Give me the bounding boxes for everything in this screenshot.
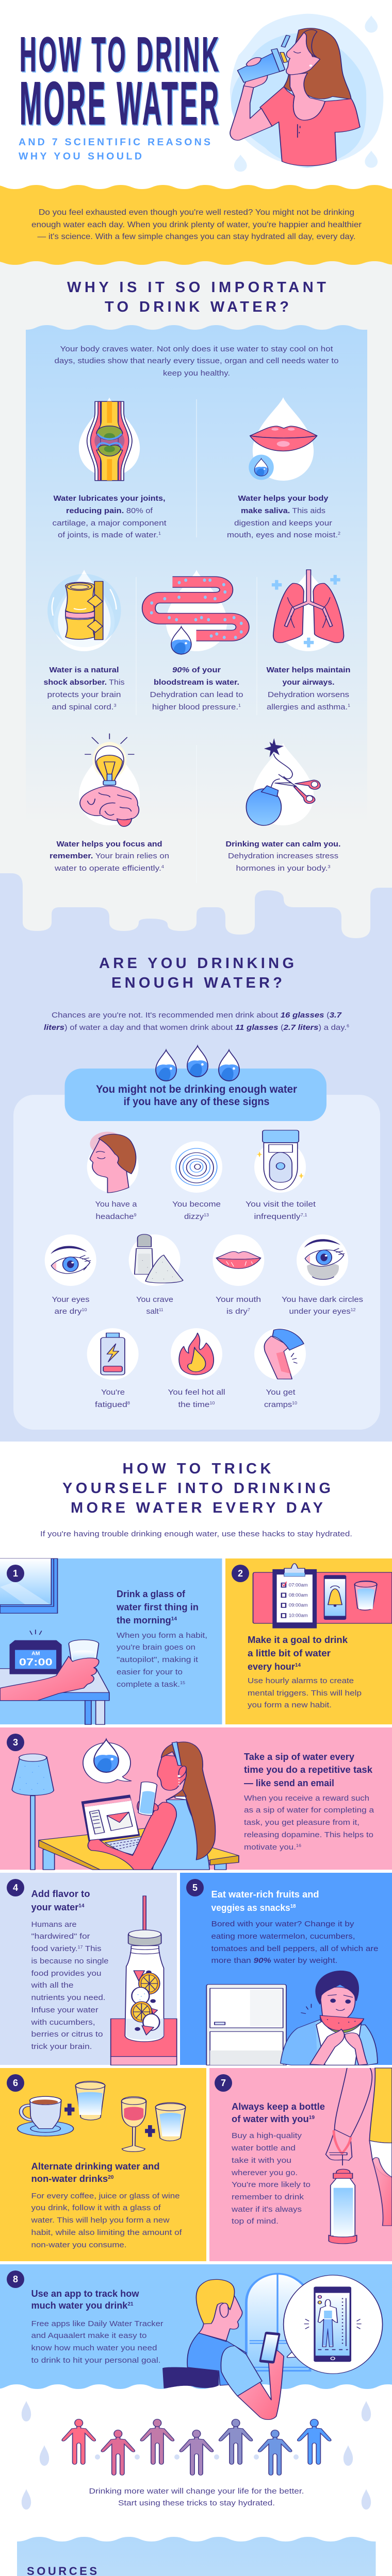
text: tip 8: 21	[127, 2301, 134, 2307]
illustration: woman drinking water	[230, 14, 383, 172]
text: joints: 1	[158, 531, 161, 536]
dividers	[136, 399, 257, 883]
text: tip 4: with cucumbers,	[30, 2018, 95, 2027]
lavender section with drip edge	[0, 873, 392, 1442]
text: tip 4: "hardwired" for	[31, 1932, 90, 1941]
text: tip 2: a little bit of water	[248, 1648, 331, 1658]
panel 3: sip every task	[0, 1727, 392, 1870]
text: tip 4: 14	[78, 1903, 85, 1909]
text: tip 5: veggies as snacks	[211, 1903, 293, 1913]
icon: headache	[90, 1132, 136, 1193]
heading: are you drinking enough water	[99, 955, 294, 991]
text: tip 4: is because no single	[31, 1957, 108, 1965]
icon: dizzy spiral	[176, 1148, 217, 1185]
text: tip 3: — like send an email	[244, 1778, 334, 1788]
text: tip 4: your water	[31, 1902, 78, 1912]
text: saliva	[227, 494, 341, 539]
panel 3: sip every task: 3	[13, 1737, 18, 1748]
labels: signs row 1: You visit the toilet	[246, 1200, 316, 1209]
icon: dry eye	[51, 1246, 90, 1274]
text: joints	[53, 494, 167, 539]
labels: signs row 2: Your eyes	[52, 1295, 90, 1304]
text: tip 3: 16	[296, 1843, 302, 1848]
panel intro text	[55, 345, 338, 378]
text: joints: reducing pain. 80% of	[66, 506, 153, 515]
subtitle	[19, 137, 210, 162]
icon: lips	[249, 426, 317, 480]
labels: signs row 2: under your eyes	[289, 1307, 345, 1316]
labels: signs row 3: You're	[101, 1388, 125, 1397]
text: saliva: make saliva. This aids	[241, 506, 325, 515]
text: bloodstream	[150, 666, 243, 711]
text: tip 3	[244, 1752, 374, 1852]
text: tip 7: Always keep a bottle	[232, 2102, 325, 2112]
icon: lightbulb and brain	[80, 734, 139, 826]
text: tip 6: For every coffee, juice or glass of wine	[31, 2192, 179, 2200]
text: tip 1: 15	[180, 1681, 186, 1685]
text: airways: Dehydration worsens	[268, 690, 349, 699]
text: tip 6: you drink, follow it with a glass of	[31, 2204, 161, 2212]
labels: signs row 1: You become	[172, 1200, 221, 1209]
icon: bomb and scissors	[246, 738, 320, 825]
text: tip 4: This	[83, 1944, 101, 1953]
panel 2: every hour	[225, 1558, 392, 1724]
labels: signs row 1: dizzy	[184, 1212, 202, 1221]
illustration: checklist, phone and glass	[253, 1564, 392, 1629]
text: shock absorber: protects your brain	[47, 690, 121, 699]
subtitle: AND 7 SCIENTIFIC REASONS	[19, 137, 210, 148]
panel 4: add flavor	[0, 1873, 177, 2065]
text: tip 6: 20	[108, 2175, 114, 2180]
text: tip 4: berries or citrus to	[31, 2030, 103, 2039]
icon: knee joint	[87, 401, 132, 481]
text: airways: allergies and asthma.	[267, 703, 340, 711]
text: tip 3: task, you get pleasure from it,	[244, 1818, 360, 1827]
text: tip 5: more than 90% water by weight.	[211, 1956, 337, 1965]
labels: signs row 2: You crave	[136, 1295, 173, 1304]
text: tip 8: know how much water you need	[31, 2344, 157, 2352]
text: tip 4: Infuse your water	[31, 2006, 98, 2014]
panel intro text: days, studies show that nearly every tissue, organ and cell needs water to	[55, 357, 338, 365]
illustration: woman at laptop	[12, 1739, 239, 1870]
text: tip 6	[30, 2161, 182, 2249]
text: saliva: digestion and keeps your	[234, 519, 332, 528]
text: saliva: mouth, eyes and nose moist.	[227, 531, 326, 539]
text: bloodstream: 90% of your	[172, 666, 221, 674]
labels: signs row 2: Your mouth	[216, 1295, 261, 1304]
labels: signs row 1: headache	[96, 1212, 129, 1221]
text: bloodstream: Dehydration can lead to	[150, 690, 243, 699]
text: saliva: 2	[338, 531, 341, 536]
illustration: window, clock, hand and glass	[0, 1558, 109, 1724]
text: shock absorber: and spinal cord.	[52, 703, 106, 711]
heading: are you drinking enough water: ARE YOU DRINKING	[99, 955, 294, 972]
labels: signs row 3: cramps	[264, 1400, 289, 1409]
text: tip 8	[31, 2289, 164, 2365]
icon: bloodstream	[149, 579, 243, 654]
panel 5: water-rich fruits: 5	[192, 1883, 198, 1893]
text: focus: water to operate efficiently.	[55, 864, 146, 873]
text: tip 1	[116, 1589, 207, 1689]
paragraph: recommended intake: liters ) of water a day and that women drink about 11 glasses (2.7 liters ) a day.	[44, 1023, 344, 1032]
text: shock absorber: 3	[113, 703, 117, 708]
text: tip 1: 14	[171, 1616, 177, 1622]
text: tip 1: the morning	[117, 1615, 170, 1625]
panel: sources	[17, 2537, 375, 2576]
text: calm: Dehydration increases stress	[228, 852, 338, 860]
text: tip 4: nutrients you need.	[31, 1993, 105, 2002]
icon: flame	[179, 1333, 214, 1375]
text: tip 8: Use an app to track how	[31, 2289, 140, 2299]
white drop backgrounds	[54, 397, 339, 825]
text: tip 1: you're brain goes on	[117, 1643, 195, 1652]
text: calm: 3	[328, 865, 331, 869]
intro text: Do you feel exhausted even though you're well rested? You might not be drinking	[39, 208, 354, 217]
text: tip 2: you form a new habit.	[248, 1701, 332, 1709]
text: tip 3: motivate you.	[244, 1843, 290, 1852]
text: bloodstream: higher blood pressure.	[152, 703, 229, 711]
text: tip 3: time you do a repetitive task	[244, 1765, 373, 1775]
intro text: — it's science. With a few simple changes you can stay hydrated all day, every day.	[37, 232, 356, 241]
panel 7: bottle with you	[209, 2068, 392, 2261]
title	[20, 27, 222, 139]
text: tip 4: with all the	[30, 1981, 73, 1990]
labels: signs row 3: 10	[292, 1401, 298, 1405]
text: airways: your airways.	[283, 678, 334, 687]
text: shock absorber	[43, 666, 125, 711]
text: calm: hormones in your body.	[236, 864, 316, 873]
text: bloodstream: bloodstream is water.	[154, 678, 239, 687]
text: tip 5: Bored with your water? Change it by	[211, 1920, 354, 1928]
text: airways: Water helps maintain	[266, 666, 351, 674]
text: tip 2: mental triggers. This will help	[248, 1689, 362, 1698]
icon: spine	[47, 570, 121, 651]
heading: why is it so important	[67, 279, 326, 315]
panel intro text: Your body craves water. Not only does it use water to stay cool on hot	[60, 345, 333, 353]
labels: signs row 2: are dry	[55, 1307, 78, 1316]
icon: toilet	[257, 1130, 304, 1190]
text: tip 1: When you form a habit,	[117, 1631, 207, 1640]
panel 6: alternate drinks	[0, 2068, 206, 2261]
text: tip 7: wherever you go.	[231, 2168, 298, 2177]
text: tip 7: 19	[309, 2115, 315, 2121]
labels: signs row 1: 7,1	[301, 1213, 307, 1217]
text: tip 2: Make it a goal to drink	[248, 1635, 348, 1645]
text: joints: cartilage, a major component	[53, 519, 167, 528]
closing text	[89, 2487, 304, 2507]
text: tip 7: top of mind.	[232, 2217, 279, 2226]
icon: dark circles eye	[304, 1239, 344, 1280]
text: tip 7: take it with you	[232, 2156, 291, 2165]
illustration: checklist, phone and glass: 10:00am	[289, 1613, 308, 1618]
decorative closing drops	[22, 2401, 371, 2510]
labels: signs row 3: You get	[266, 1388, 296, 1397]
text: tip 3: Take a sip of water every	[244, 1752, 354, 1762]
text: tip 8: Free apps like Daily Water Tracker	[31, 2319, 164, 2328]
icon: dry mouth	[216, 1251, 261, 1268]
text: tip 2: every hour	[248, 1662, 295, 1672]
intro: hacks: If you're having trouble drinking enough water, use these hacks to stay hydrated.	[40, 1530, 352, 1538]
panel 4: add flavor: 4	[13, 1883, 18, 1893]
text: tip 5: Eat water-rich fruits and	[211, 1889, 319, 1900]
text: airways: 1	[348, 703, 351, 708]
text: tip 8: and Aquaalert make it easy to	[31, 2331, 146, 2340]
paragraph: recommended intake: 6	[347, 1024, 350, 1028]
panel 1: glass in the morning: 1	[13, 1568, 18, 1579]
icon: three water drops	[156, 1046, 239, 1081]
labels: signs row 2: 10	[81, 1308, 87, 1312]
subtitle: WHY YOU SHOULD	[19, 150, 142, 162]
labels: signs row 1	[95, 1200, 316, 1221]
text: tip 4: food variety.	[31, 1944, 73, 1953]
text: tip 1: Drink a glass of	[117, 1589, 186, 1599]
labels: signs row 3: 10	[209, 1401, 215, 1405]
intro text	[31, 208, 362, 241]
closing text: Start using these tricks to stay hydrated.	[118, 2499, 275, 2507]
callout pill: You might not be drinking enough water	[96, 1083, 297, 1095]
callout pill: if you have any of these signs	[124, 1096, 269, 1108]
text: joints: Water lubricates your joints,	[54, 494, 165, 503]
text: tip 6: habit, while also limiting the amount of	[31, 2228, 182, 2237]
text: tip 8: much water you drink	[31, 2300, 127, 2311]
icon: low battery	[101, 1333, 125, 1375]
text: tip 4: Humans are	[31, 1920, 76, 1929]
text: tip 2: 14	[295, 1663, 301, 1668]
text: focus: 4	[161, 865, 165, 869]
icon: salt	[135, 1234, 183, 1283]
labels: signs row 1: You have a	[95, 1200, 137, 1209]
text: tip 8: to drink to hit your personal goal.	[31, 2356, 161, 2365]
illustration: checklist, phone and glass: 08:00am	[289, 1592, 308, 1598]
text: tip 7: water bottle and	[231, 2144, 296, 2153]
panel 8: use an app	[0, 2264, 392, 2419]
panel 7: bottle with you: 7	[221, 2078, 226, 2088]
text: calm: Drinking water can calm you.	[226, 840, 340, 849]
text: tip 1: complete a task.	[117, 1680, 173, 1689]
labels: signs row 2: 12	[351, 1308, 356, 1312]
labels: signs row 1: 13	[204, 1213, 209, 1217]
panel 8: use an app: 8	[13, 2274, 18, 2284]
heading: how to trick yourself: YOURSELF INTO DRINKING	[62, 1480, 331, 1497]
intro text: enough water each day. When you drink plenty of water, you're happier and healthier	[31, 221, 362, 229]
heading: why is it so important: TO DRINK WATER?	[105, 299, 289, 315]
labels: signs row 1: infrequently	[254, 1212, 294, 1221]
illustration: checklist, phone and glass: 09:00am	[289, 1603, 308, 1608]
labels: signs row 3: 8	[127, 1401, 130, 1405]
text: focus: Water helps you focus and	[57, 840, 162, 849]
text: shock absorber: Water is a natural	[50, 666, 119, 674]
labels: signs row 3: You feel hot all	[168, 1388, 225, 1397]
labels: signs row 3: fatigued	[95, 1400, 122, 1409]
labels: signs row 2: salt	[146, 1307, 158, 1316]
text: tip 7: remember to drink	[232, 2193, 304, 2201]
row of seven people changing colour	[62, 2419, 331, 2475]
text: tip 4: Add flavor to	[31, 1889, 90, 1899]
text: tip 7: Buy a high-quality	[232, 2131, 302, 2140]
text: tip 5: eating more watermelon, cucumbers,	[211, 1932, 355, 1941]
panel 5: water-rich fruits	[180, 1873, 392, 2065]
heading: why is it so important: WHY IS IT SO IMPORTANT	[67, 279, 326, 296]
text: tip 7: water if it's always	[231, 2205, 302, 2214]
text: tip 6: water. This will help you form a new	[30, 2216, 170, 2225]
text: tip 1: easier for your to	[117, 1668, 183, 1676]
labels: signs row 2	[52, 1295, 363, 1316]
labels: signs row 3	[95, 1388, 298, 1409]
icon: lungs	[272, 570, 344, 648]
text: tip 7	[231, 2102, 325, 2226]
illustration: hand carrying water bottle	[326, 2068, 392, 2244]
heading: are you drinking enough water: ENOUGH WATER?	[111, 975, 282, 991]
yellow intro band	[0, 185, 392, 273]
labels: signs row 2: 11	[159, 1308, 164, 1312]
text: airways	[266, 666, 351, 711]
illustration: checklist, phone and glass: 07:00am	[289, 1582, 308, 1588]
text: focus: remember. Your brain relies on	[50, 852, 169, 860]
illustration: man eating watermelon	[206, 1971, 378, 2065]
text: tip 4	[30, 1889, 108, 2051]
heading: how to trick yourself: HOW TO TRICK	[123, 1461, 271, 1477]
text: tip 1: "autopilot", making it	[117, 1655, 199, 1664]
paragraph: recommended intake: Chances are you're not. It's recommended men drink about 16 glasses (3.7	[52, 1011, 342, 1020]
text: bloodstream: 1	[238, 703, 241, 708]
labels: signs row 3: the time	[178, 1400, 206, 1409]
grey section background	[0, 261, 392, 943]
text: focus	[50, 840, 169, 873]
text: tip 3: releasing dopamine. This helps to	[244, 1831, 373, 1839]
text: tip 2: Use hourly alarms to create	[248, 1676, 354, 1685]
illustration: window, clock, hand and glass: 07:00	[19, 1657, 53, 1668]
labels: signs row 2: 7	[248, 1308, 251, 1312]
text: joints: of joints, is made of water.	[58, 531, 147, 539]
text: tip 6: non-water you consume.	[31, 2241, 127, 2249]
panel 1: glass in the morning	[0, 1558, 222, 1724]
text: tip 6: Alternate drinking water and	[31, 2161, 160, 2172]
text: tip 3: as a sip of water for completing a	[244, 1806, 374, 1815]
panel 2: every hour: 2	[238, 1568, 243, 1579]
labels: signs row 2: You have dark circles	[282, 1295, 363, 1304]
text: tip 7: of water with you	[232, 2114, 307, 2124]
illustration: infused water bottle	[111, 1896, 177, 2065]
labels: signs row 1: 9	[134, 1213, 137, 1217]
text: tip 5: 18	[290, 1904, 296, 1909]
illustration: man using water app	[162, 2274, 383, 2419]
text: tip 5	[211, 1889, 379, 1965]
panel 6: alternate drinks: 6	[13, 2078, 18, 2088]
callout pill	[65, 1069, 326, 1121]
icon circles	[45, 1141, 348, 1380]
text: tip 1: water first thing in	[116, 1602, 199, 1613]
text: tip 5: tomatoes and bell peppers, all of which are	[211, 1944, 379, 1953]
panel intro text: keep you healthy.	[163, 369, 230, 378]
text: calm	[226, 840, 340, 873]
paragraph: recommended intake	[44, 1011, 350, 1032]
text: shock absorber: shock absorber. This	[43, 678, 125, 687]
text: saliva: Water helps your body	[238, 494, 329, 503]
text: tip 7: You're more likely to	[232, 2180, 311, 2189]
text: tip 2	[248, 1635, 362, 1709]
labels: signs row 2: is dry	[226, 1307, 245, 1316]
illustration: coffee and wine with water	[18, 2081, 186, 2151]
illustration: window, clock, hand and glass: AM	[31, 1651, 40, 1657]
panel: signs of dehydration	[13, 1095, 380, 1430]
text: tip 4: 17	[78, 1945, 83, 1950]
heading: how to trick yourself	[62, 1461, 331, 1516]
icon: cramp arm	[264, 1329, 304, 1379]
heading: how to trick yourself: MORE WATER EVERY DAY	[71, 1500, 323, 1516]
text: tip 6: non-water drinks	[31, 2174, 106, 2184]
text: tip 4: food provides you	[31, 1969, 101, 1978]
text: tip 4: trick your brain.	[31, 2042, 92, 2051]
text: tip 3: When you receive a reward such	[244, 1794, 369, 1803]
panel: why water matters	[26, 325, 367, 824]
closing text: Drinking more water will change your life for the better.	[89, 2487, 304, 2496]
